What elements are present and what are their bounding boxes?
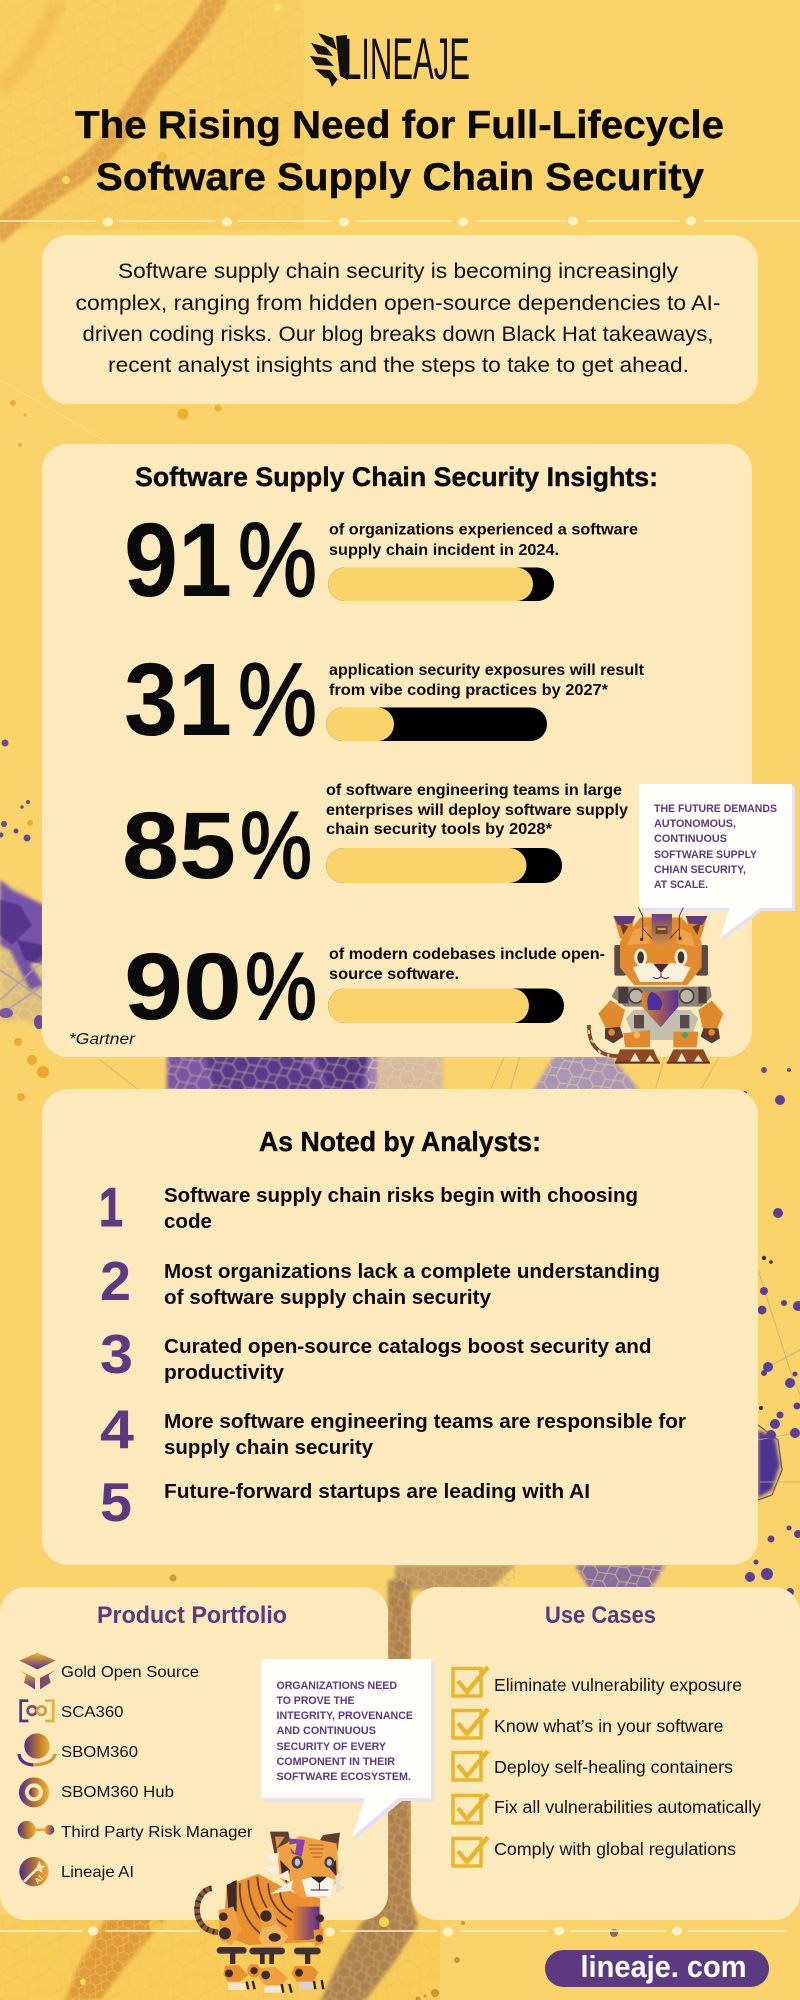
callout: future demands: CHIAN SECURITY, [654, 864, 746, 876]
divider: top [0, 216, 800, 226]
callout: organizations need: TO PROVE THE [276, 1695, 354, 1707]
decoration background: top-left gold mesh [0, 0, 304, 450]
callout: organizations need: SECURITY OF EVERY [276, 1741, 387, 1753]
stat: 85%: enterprises will deploy software supply [326, 802, 628, 819]
callout: future demands: SOFTWARE SUPPLY [654, 849, 758, 861]
icon: lion head [310, 33, 348, 87]
stat: 91%: of organizations experienced a software [329, 522, 638, 538]
item 4: 4 [100, 1398, 134, 1460]
list: products: SBOM360 [61, 1744, 138, 1761]
list: use cases: Comply with global regulations [494, 1839, 736, 1859]
panel: intro [42, 235, 758, 404]
stat: 90%: % [245, 934, 317, 1040]
title: Software Supply Chain Security [96, 156, 704, 199]
callout: organizations need [261, 1659, 434, 1840]
intro text: driven coding risks. Our blog breaks down Black Hat takeaways, [82, 322, 714, 346]
stat: 31%: application security exposures will result [329, 662, 644, 679]
list: use cases: Know what’s in your software [494, 1716, 724, 1736]
item 4: supply chain security [164, 1437, 374, 1459]
list: use cases: Deploy self-healing containers [494, 1757, 733, 1777]
stat: 90%: 90 [124, 934, 242, 1040]
callout: future demands: AT SCALE. [654, 879, 708, 891]
item 1 [99, 1176, 638, 1238]
heading: use cases: Use Cases [545, 1602, 656, 1629]
button: lineaje.com: lineaje. com [580, 1949, 746, 1984]
footnote: Gartner: *Gartner [69, 1031, 136, 1048]
list: use cases: Eliminate vulnerability exposure [494, 1675, 742, 1695]
list: products: SBOM360 Hub [61, 1784, 174, 1801]
item 1: code [164, 1211, 212, 1233]
intro text: Software supply chain security is becoming increasingly [118, 259, 678, 283]
list: use cases [494, 1675, 761, 1859]
item 4: More software engineering teams are responsible for [164, 1411, 686, 1433]
item 3 [100, 1323, 652, 1385]
item 1: 1 [99, 1176, 123, 1238]
callout: future demands: THE FUTURE DEMANDS [654, 803, 777, 815]
callout: organizations need: SOFTWARE ECOSYSTEM. [276, 1771, 411, 1783]
list: products [61, 1664, 253, 1881]
list: products: Gold Open Source [61, 1664, 199, 1681]
item 4 [100, 1398, 686, 1460]
panel: use cases [411, 1587, 800, 1920]
divider: bottom [0, 1926, 786, 1936]
list: products: Lineaje AI [61, 1864, 134, 1881]
logo: Lineaje [310, 27, 470, 92]
intro text: recent analyst insights and the steps to take to get ahead. [108, 353, 689, 377]
item 3: productivity [164, 1362, 285, 1384]
stat: 90%: of modern codebases include open- [329, 946, 605, 963]
callout: future demands: CONTINUOUS [654, 833, 727, 845]
stat: 31%: from vibe coding practices by 2027* [329, 682, 609, 699]
wordmark: LINEAJE [344, 27, 470, 92]
icons: products: AI [33, 1874, 45, 1886]
callout: organizations need: INTEGRITY, PROVENANCE [276, 1710, 413, 1722]
item 5 [100, 1471, 590, 1533]
icons: products [18, 1653, 56, 1886]
stat: 85%: chain security tools by 2028* [326, 821, 553, 838]
stat: 85%: % [240, 793, 312, 899]
item 1: Software supply chain risks begin with choosing [164, 1185, 638, 1207]
list: products: SCA360 [61, 1704, 124, 1721]
insights heading: Software Supply Chain Security Insights: [135, 462, 658, 492]
title [75, 104, 724, 199]
callout: organizations need: COMPONENT IN THEIR [276, 1756, 395, 1768]
stat: 31%: 31 [124, 642, 232, 757]
stat: 91%: % [238, 502, 317, 619]
stat: 31%: % [238, 642, 317, 757]
intro text: complex, ranging from hidden open-source dependencies to AI- [76, 291, 720, 315]
analysts heading: As Noted by Analysts: [259, 1126, 541, 1157]
stat: 91%: 91 [124, 502, 232, 619]
panel: analysts [42, 1089, 758, 1565]
callout: future demands: AUTONOMOUS, [654, 818, 736, 830]
item 2: of software supply chain security [164, 1287, 492, 1309]
heading: product portfolio: Product Portfolio [97, 1602, 287, 1629]
stat: 91%: supply chain incident in 2024. [329, 542, 559, 559]
item 3: 3 [100, 1323, 133, 1385]
stat: 31% [124, 642, 644, 757]
callout: organizations need: AND CONTINUOUS [276, 1725, 376, 1737]
title: The Rising Need for Full-Lifecycle [75, 104, 724, 147]
panel: product portfolio [0, 1587, 388, 1920]
panel: insights [42, 444, 752, 1057]
decoration background: right purple cluster and nodes [743, 1091, 800, 1596]
decoration background: left purple cluster [0, 740, 49, 1101]
decoration background: purple band under insights [100, 1055, 791, 1104]
icons: checkboxes [453, 1667, 488, 1866]
stat: 90% [124, 934, 605, 1040]
stat: 90%: source software. [329, 966, 459, 983]
intro text [76, 259, 720, 377]
decoration background: bottom gold and brown strands [0, 1565, 665, 2000]
item 5: 5 [100, 1471, 132, 1533]
item 2: Most organizations lack a complete understanding [164, 1261, 660, 1283]
list: products: Third Party Risk Manager [61, 1824, 253, 1841]
stat: 85% [122, 782, 628, 899]
list: use cases: Fix all vulnerabilities automatically [494, 1797, 761, 1817]
stat: 85%: of software engineering teams in large [326, 782, 622, 799]
item 2 [100, 1250, 660, 1312]
stat: 91% [124, 502, 638, 619]
item 5: Future-forward startups are leading with AI [164, 1481, 590, 1503]
item 3: Curated open-source catalogs boost security and [164, 1336, 652, 1358]
mascot: robot tiger walking [197, 1832, 345, 1993]
callout: future demands [639, 784, 795, 941]
stat: 85%: 85 [122, 793, 236, 899]
callout: organizations need: ORGANIZATIONS NEED [276, 1680, 397, 1692]
mascot: robot tiger [589, 907, 723, 1064]
item 2: 2 [100, 1250, 131, 1312]
